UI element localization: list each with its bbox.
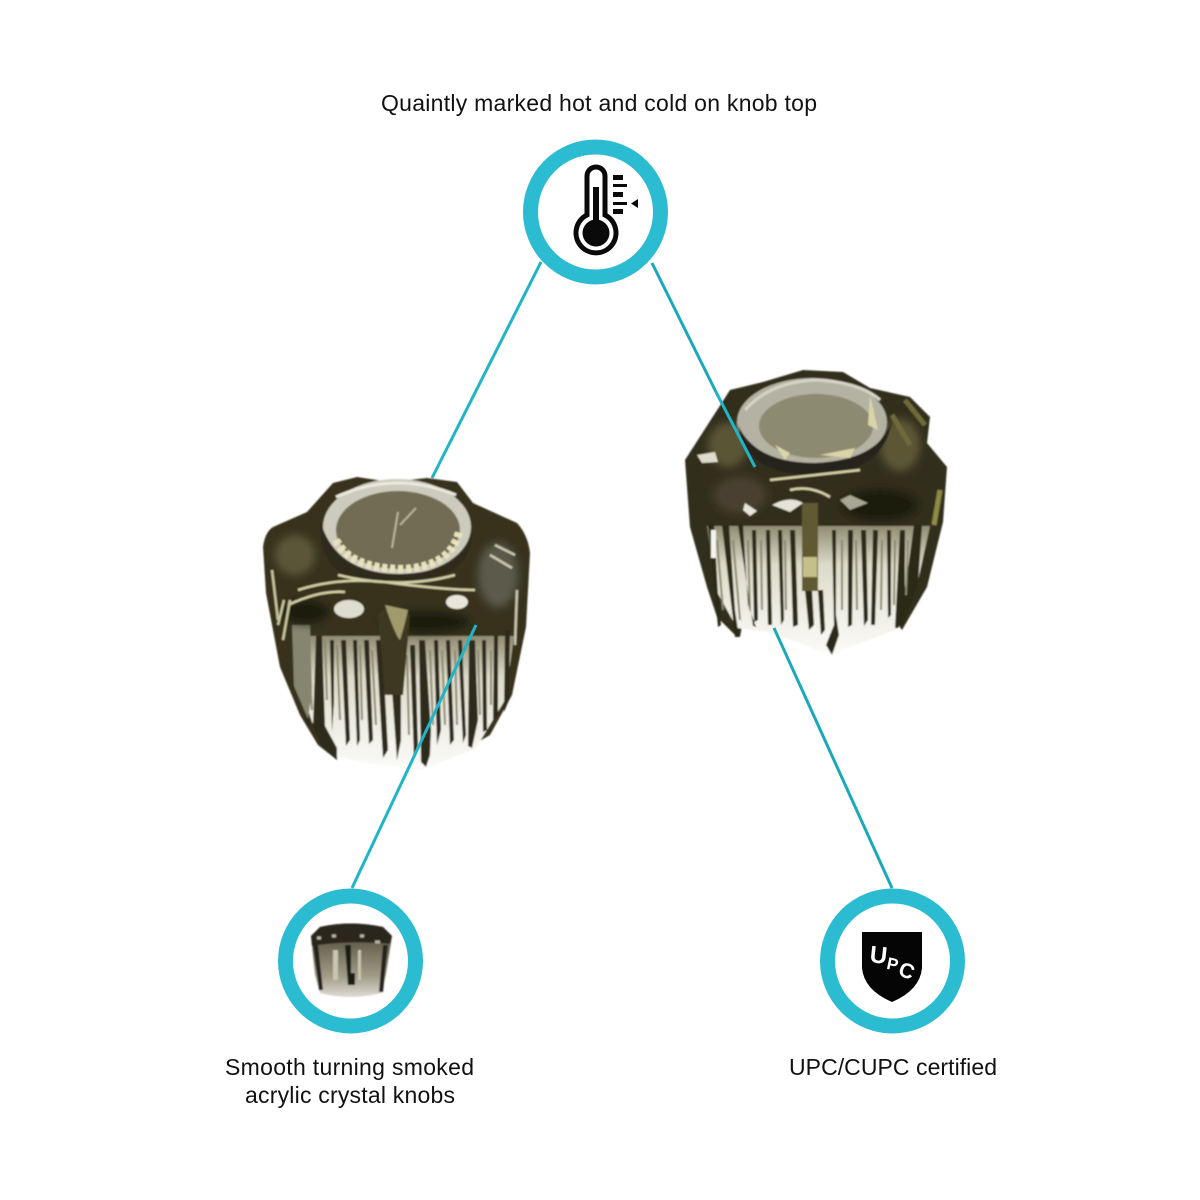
connector: thermometer to right knob	[652, 263, 716, 392]
dome field	[759, 394, 873, 458]
connector: over right knob	[716, 392, 755, 467]
band highlights	[272, 545, 517, 645]
caption: smoked acrylic knobs: Smooth turning smoked	[225, 1054, 474, 1080]
right knob photo	[685, 370, 947, 655]
dome rim	[737, 378, 887, 466]
icon ring: smoked knob	[286, 896, 416, 1026]
dark ring	[320, 520, 473, 583]
dome rim	[323, 479, 471, 575]
caption: certification: UPC/CUPC certified	[789, 1054, 997, 1080]
dome field	[336, 491, 460, 569]
body mottling	[708, 419, 920, 521]
left knob photo	[263, 477, 530, 770]
heading: knob top: Quaintly marked hot and cold on knob top	[381, 90, 817, 116]
dome reflections	[775, 395, 878, 460]
icon: UPC shield	[862, 932, 922, 1002]
fine rib tints	[717, 540, 908, 620]
icon: UPC shield: U	[868, 941, 889, 970]
icon: UPC shield: P	[885, 954, 900, 975]
serrated ring	[336, 532, 459, 569]
lower ribbed body	[707, 526, 930, 655]
dark silhouette	[685, 370, 947, 637]
grey side panel	[292, 625, 312, 719]
top highlight	[745, 380, 880, 410]
top highlight	[336, 483, 456, 497]
fine rib tints	[307, 640, 491, 735]
icon ring: thermometer	[530, 147, 660, 277]
band highlights	[697, 400, 940, 591]
connector: thermometer to left knob	[432, 262, 541, 478]
caption: smoked acrylic knobs: acrylic crystal knobs	[245, 1082, 455, 1108]
rib shadows	[708, 525, 922, 655]
dark silhouette	[263, 477, 530, 760]
hot and cold mark	[392, 508, 416, 548]
icon: small knob photo	[311, 924, 392, 997]
icon ring: UPC	[828, 896, 958, 1026]
icon: thermometer	[576, 167, 638, 253]
caption: smoked acrylic knobs	[225, 1054, 474, 1108]
lower ribbed body	[296, 636, 514, 770]
dark ring	[738, 420, 892, 475]
icon: UPC shield: C	[895, 958, 918, 985]
connector: left knob to smoked knob icon	[352, 625, 476, 888]
rib shadows	[296, 630, 510, 767]
body mottling	[275, 535, 518, 633]
center stem	[378, 608, 410, 695]
connector: right knob to UPC icon	[774, 628, 892, 888]
